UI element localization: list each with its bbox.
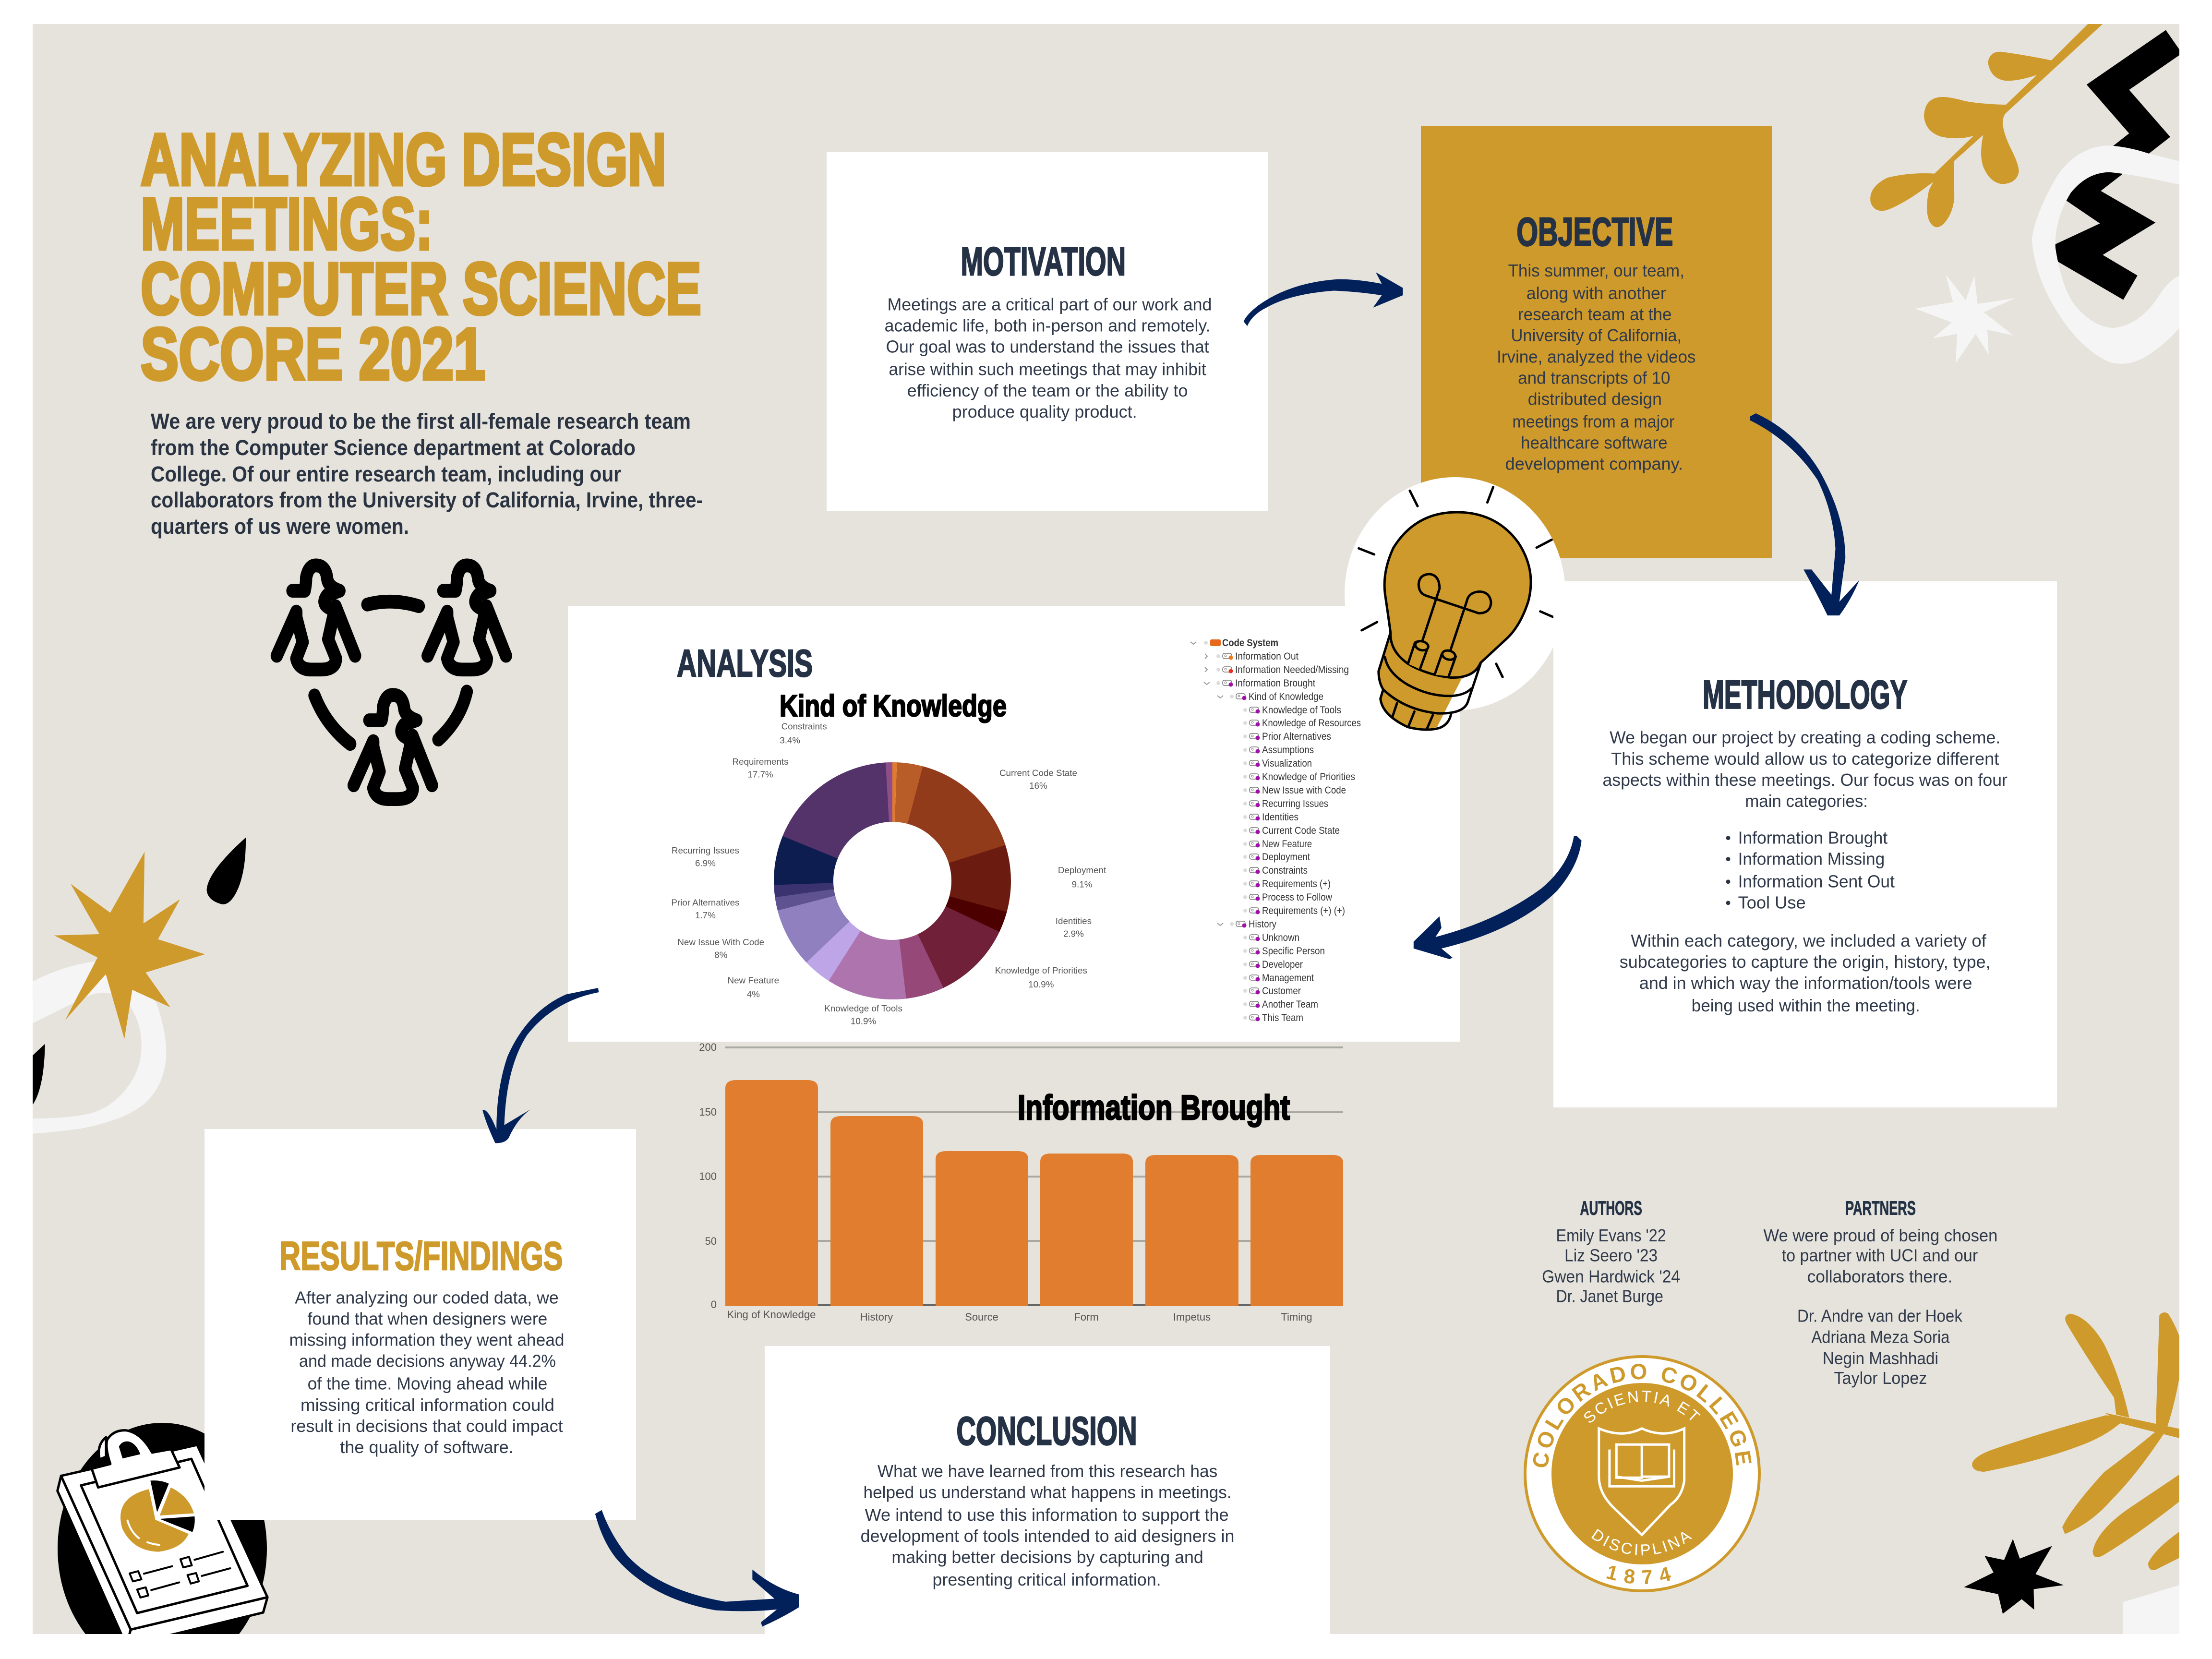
arrow: motivation to objective <box>1244 272 1403 326</box>
body: conclusion: making better decisions by capturing and <box>891 1548 1203 1567</box>
bar chart: Information Brought: History <box>860 1311 893 1323</box>
body: methodology continued: being used within the meeting. <box>1692 996 1920 1015</box>
code system tree: New Feature <box>1262 839 1312 850</box>
intro paragraph: collaborators from the University of California, Irvine, three- <box>151 488 703 512</box>
panel: analysis <box>568 606 1460 1042</box>
code system tree: Kind of Knowledge <box>1249 691 1323 702</box>
donut labels: New Issue With Code <box>677 937 764 947</box>
donut labels: 16% <box>1029 781 1047 791</box>
icon: clipboard with pie chart <box>58 1423 267 1659</box>
title: ANALYZING DESIGN <box>141 119 666 201</box>
code system tree: Deployment <box>1262 852 1310 863</box>
body: methodology continued <box>1620 931 1991 1015</box>
title: SCORE 2021 <box>141 313 485 395</box>
intro paragraph: quarters of us were women. <box>151 514 409 539</box>
body: results: found that when designers were <box>308 1310 547 1329</box>
body: methodology continued: subcategories to capture the origin, history, type, <box>1620 952 1991 972</box>
body: results: of the time. Moving ahead while <box>308 1374 547 1394</box>
donut labels <box>671 721 1106 1026</box>
code system tree: Requirements (+) <box>1262 878 1331 890</box>
chart title: Information Brought: Information Brought <box>1018 1089 1290 1127</box>
partners block: to partner with UCI and our <box>1782 1246 1978 1265</box>
body: results: result in decisions that could impact <box>290 1417 563 1436</box>
title <box>141 119 701 395</box>
code system tree: Customer <box>1262 986 1301 997</box>
body: methodology <box>1602 728 2008 811</box>
donut labels: Constraints <box>781 721 827 731</box>
code system tree: Information Out <box>1235 651 1298 662</box>
body: objective: healthcare software <box>1521 433 1668 453</box>
body: objective: distributed design <box>1528 389 1662 409</box>
bar chart: Information Brought: Form <box>1074 1311 1099 1323</box>
logo: Colorado College seal: SCIENTIA ET <box>1584 1390 1701 1423</box>
code system tree: Knowledge of Resources <box>1262 718 1361 729</box>
code system tree: Knowledge of Tools <box>1262 705 1341 716</box>
code system tree: Visualization <box>1262 758 1312 769</box>
bullet list: Tool Use <box>1738 893 1806 913</box>
body: motivation: Meetings are a critical part of our work and <box>888 295 1212 314</box>
bar chart: Information Brought: 200 <box>699 1041 717 1053</box>
code system tree: This Team <box>1262 1012 1303 1023</box>
body: motivation: efficiency of the team or the ability to <box>907 381 1188 400</box>
partners block: Dr. Andre van der Hoek <box>1797 1307 1962 1326</box>
code system tree <box>1190 637 1361 1023</box>
body: results: and made decisions anyway 44.2% <box>299 1352 556 1371</box>
bar chart: Information Brought: Impetus <box>1173 1311 1211 1323</box>
donut labels: Knowledge of Priorities <box>995 965 1087 975</box>
code system tree: Information Needed/Missing <box>1235 664 1349 675</box>
body: objective: meetings from a major <box>1512 412 1674 431</box>
body: results: missing information they went ahead <box>289 1331 565 1350</box>
decoration: left star and loop <box>33 838 246 1134</box>
partners block <box>1764 1197 1997 1388</box>
body: motivation: Our goal was to understand the issues that <box>886 337 1209 357</box>
authors block: Liz Seero '23 <box>1564 1246 1658 1265</box>
code system tree: Assumptions <box>1262 745 1314 756</box>
body: conclusion: development of tools intended to aid designers in <box>861 1527 1234 1546</box>
arrow: objective to methodology <box>1750 413 1859 615</box>
arrow: methodology to analysis <box>1414 836 1582 959</box>
body: objective: development company. <box>1505 455 1683 474</box>
body: conclusion <box>861 1462 1234 1589</box>
donut labels: 9.1% <box>1072 879 1093 890</box>
heading: conclusion: CONCLUSION <box>957 1408 1137 1453</box>
donut labels: Identities <box>1056 916 1092 926</box>
body: conclusion: helped us understand what happens in meetings. <box>864 1483 1232 1502</box>
partners block: Adriana Meza Soria <box>1811 1328 1949 1347</box>
partners block: PARTNERS <box>1845 1197 1916 1219</box>
body: methodology: We began our project by creating a coding scheme. <box>1610 728 2000 747</box>
bar chart: Information Brought: Timing <box>1281 1311 1312 1323</box>
code system tree: Recurring Issues <box>1262 798 1328 809</box>
panel: methodology <box>1553 581 2057 1107</box>
donut labels: Prior Alternatives <box>671 898 739 908</box>
bar chart: Information Brought: 0 <box>711 1298 717 1310</box>
body: results: the quality of software. <box>340 1438 514 1457</box>
code system tree: Prior Alternatives <box>1262 731 1331 742</box>
donut labels: Current Code State <box>999 768 1077 778</box>
body: objective <box>1497 261 1695 474</box>
body: motivation: academic life, both in-person and remotely. <box>885 316 1210 336</box>
donut labels: Requirements <box>733 757 789 767</box>
partners block: Negin Mashhadi <box>1823 1349 1938 1368</box>
title: MEETINGS: <box>141 183 433 265</box>
logo: Colorado College seal <box>1524 1355 1761 1592</box>
body: conclusion: presenting critical information. <box>933 1570 1161 1589</box>
body: objective: This summer, our team, <box>1508 261 1684 280</box>
decoration: top right branch <box>1870 24 2179 364</box>
authors block: Gwen Hardwick '24 <box>1542 1267 1680 1286</box>
body: results <box>289 1288 565 1457</box>
authors block: AUTHORS <box>1580 1197 1642 1219</box>
authors block <box>1542 1197 1680 1306</box>
bar chart: Information Brought: Source <box>965 1311 998 1323</box>
code system tree: Identities <box>1262 812 1298 823</box>
body: results: missing critical information could <box>301 1395 554 1415</box>
donut labels: 3.4% <box>780 735 800 745</box>
code system tree: Management <box>1262 973 1314 984</box>
icon: three connected women <box>277 565 506 799</box>
body: objective: research team at the <box>1518 305 1671 324</box>
code system tree: New Issue with Code <box>1262 785 1346 796</box>
logo: Colorado College seal: DISCIPLINA <box>1591 1528 1692 1555</box>
body: conclusion: What we have learned from this research has <box>878 1462 1217 1481</box>
bar chart: Information Brought: King of Knowledge <box>727 1309 816 1321</box>
code system tree: Unknown <box>1262 932 1299 943</box>
body: motivation: produce quality product. <box>952 402 1137 421</box>
body: motivation <box>885 295 1212 421</box>
arrow: analysis to results <box>482 988 599 1143</box>
panel: motivation <box>827 152 1268 511</box>
donut labels: 10.9% <box>851 1016 876 1026</box>
donut labels: 17.7% <box>747 769 773 779</box>
code system tree: Code System <box>1222 637 1278 649</box>
donut labels: 2.9% <box>1063 928 1084 938</box>
code system tree: Requirements (+) (+) <box>1262 905 1345 916</box>
heading: methodology: METHODOLOGY <box>1703 672 1907 717</box>
code system tree: Constraints <box>1262 865 1308 876</box>
partners block: Taylor Lopez <box>1834 1369 1927 1388</box>
donut labels: 10.9% <box>1028 979 1054 989</box>
panel: objective <box>1421 126 1772 558</box>
donut labels: Deployment <box>1058 865 1106 875</box>
code system tree: Another Team <box>1262 999 1318 1010</box>
code system tree: Process to Follow <box>1262 892 1333 903</box>
body: conclusion: We intend to use this information to support the <box>865 1505 1229 1525</box>
bar chart: Information Brought: 50 <box>705 1235 717 1247</box>
heading: motivation: MOTIVATION <box>961 239 1126 284</box>
body: objective: Irvine, analyzed the videos <box>1497 347 1695 366</box>
authors block: Dr. Janet Burge <box>1556 1287 1663 1306</box>
body: motivation: arise within such meetings that may inhibit <box>889 360 1206 379</box>
arrow: results to conclusion <box>595 1510 799 1626</box>
decoration: lower leaves, black star and white corner <box>1964 1475 2179 1635</box>
body: methodology: This scheme would allow us to categorize different <box>1611 749 1999 769</box>
partners block: collaborators there. <box>1807 1267 1952 1286</box>
body: methodology continued: Within each category, we included a variety of <box>1631 931 1987 950</box>
icon: light bulb on white circle <box>1345 477 1565 730</box>
donut labels: 4% <box>747 989 760 999</box>
donut labels: New Feature <box>728 975 779 985</box>
panel: conclusion <box>765 1346 1330 1634</box>
donut chart: kind of knowledge <box>804 792 981 970</box>
partners block: We were proud of being chosen <box>1764 1226 1997 1245</box>
panel: results and findings <box>204 1129 636 1520</box>
bar chart: Information Brought <box>699 1041 1343 1323</box>
authors block: Emily Evans '22 <box>1556 1226 1666 1245</box>
bar chart: Information Brought: 100 <box>699 1170 717 1182</box>
chart title: kind of knowledge: Kind of Knowledge <box>780 689 1007 723</box>
code system tree: History <box>1249 919 1276 930</box>
intro paragraph: College. Of our entire research team, including our <box>151 462 621 486</box>
body: objective: along with another <box>1527 284 1666 303</box>
body: methodology continued: and in which way the information/tools were <box>1639 974 1972 993</box>
logo: Colorado College seal: COLORADO COLLEGE <box>1533 1364 1752 1467</box>
bar chart: Information Brought: 150 <box>699 1106 717 1118</box>
donut labels: 8% <box>714 950 728 960</box>
body: results: After analyzing our coded data, we <box>295 1288 559 1307</box>
donut labels: 6.9% <box>695 858 716 868</box>
decoration: bottom right leaves <box>1972 1312 2180 1534</box>
body: objective: University of California, <box>1511 326 1682 345</box>
intro paragraph <box>151 409 703 539</box>
donut labels: Recurring Issues <box>672 845 739 855</box>
body: methodology: main categories: <box>1745 792 1868 811</box>
intro paragraph: We are very proud to be the first all-female research team <box>151 409 691 433</box>
logo: Colorado College seal: 1874 <box>1606 1566 1671 1584</box>
donut labels: Knowledge of Tools <box>824 1003 902 1013</box>
code system tree: Knowledge of Priorities <box>1262 771 1355 782</box>
code system tree: Specific Person <box>1262 946 1325 957</box>
code system tree: Information Brought <box>1235 678 1315 689</box>
bullet list: Information Sent Out <box>1738 872 1895 891</box>
title: COMPUTER SCIENCE <box>141 248 701 330</box>
code system tree: Developer <box>1262 959 1303 970</box>
bullet list <box>1726 828 1895 913</box>
donut labels: 1.7% <box>695 910 716 920</box>
heading: objective: OBJECTIVE <box>1516 209 1673 254</box>
code system tree: Current Code State <box>1262 825 1340 836</box>
heading: analysis: ANALYSIS <box>677 642 813 685</box>
intro paragraph: from the Computer Science department at Colorado <box>151 435 636 460</box>
bullet list: Information Brought <box>1738 828 1887 847</box>
body: methodology: aspects within these meetings. Our focus was on four <box>1602 770 2008 790</box>
body: objective: and transcripts of 10 <box>1518 368 1671 387</box>
heading: results/findings: RESULTS/FINDINGS <box>279 1233 563 1278</box>
bullet list: Information Missing <box>1738 849 1885 868</box>
